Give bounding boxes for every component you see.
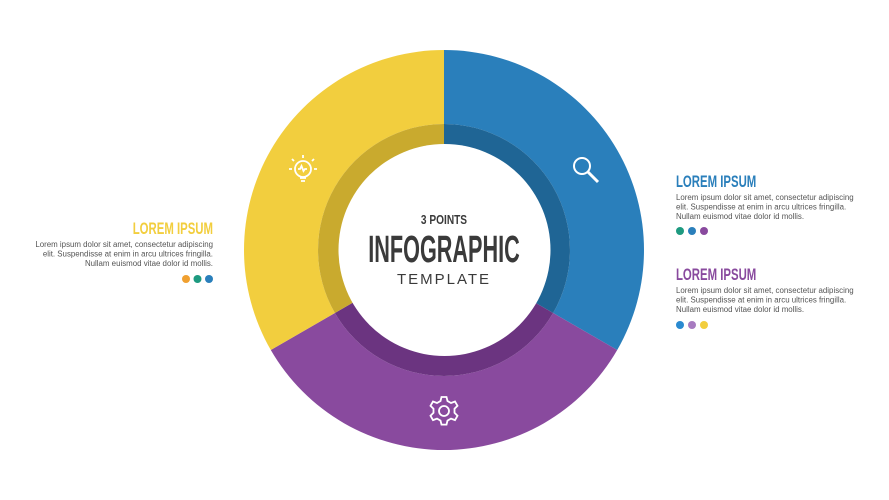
segment: purple: [271, 313, 617, 450]
text block: right bottom: Nullam euismod vitae dolor id mollis.: [676, 305, 804, 314]
text block: right top: elit. Suspendisse at enim in arcu ultrices fringilla.: [676, 202, 846, 212]
text block: right bottom: LOREM IPSUM: [676, 266, 756, 285]
text block: right bottom: Lorem ipsum dolor sit amet, consectetur adipiscing: [676, 286, 854, 295]
icon: light bulb: [289, 155, 317, 181]
text block: right top: [676, 173, 854, 235]
text block: left: elit. Suspendisse at enim in arcu ultrices fringilla.: [43, 250, 213, 258]
center title: TEMPLATE: [397, 271, 491, 288]
text block: right bottom: elit. Suspendisse at enim in arcu ultrices fringilla.: [676, 296, 846, 304]
center title: INFOGRAPHIC: [368, 228, 520, 271]
icon: gear: [430, 397, 458, 425]
text block: left: Nullam euismod vitae dolor id mollis.: [85, 259, 213, 268]
segment: blue: [444, 50, 644, 350]
text block: right top: LOREM IPSUM: [676, 173, 756, 192]
inner ring dark blue: [444, 124, 570, 313]
text block: right bottom: [676, 266, 854, 329]
center title: 3 POINTS: [421, 213, 467, 227]
icon: magnifier: [574, 158, 598, 182]
inner ring dark purple: [335, 250, 553, 376]
text block: left: [35, 220, 213, 283]
text block: right top: Lorem ipsum dolor sit amet, consectetur adipiscing: [676, 193, 854, 202]
center title: [368, 213, 520, 288]
inner ring dark yellow: [318, 124, 444, 313]
ring chart: [244, 50, 644, 450]
text block: left: LOREM IPSUM: [133, 220, 213, 239]
segment: yellow: [244, 50, 444, 350]
text block: left: Lorem ipsum dolor sit amet, consectetur adipiscing: [35, 240, 213, 249]
text block: right top: Nullam euismod vitae dolor id mollis.: [676, 212, 804, 221]
center white circle: [338, 144, 550, 356]
